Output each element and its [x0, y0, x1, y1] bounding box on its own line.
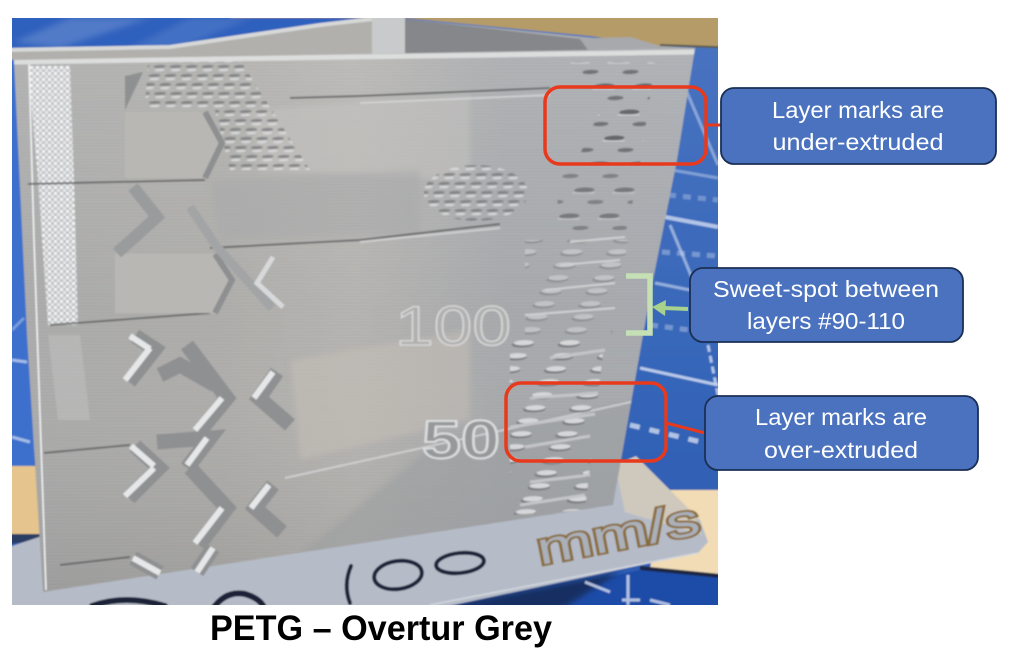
callout: over-extruded: over-extruded — [764, 437, 918, 463]
callout: under-extruded — [721, 88, 996, 164]
callout: over-extruded: Layer marks are — [755, 404, 927, 430]
lower x chevrons — [125, 336, 290, 573]
callout: sweet spot — [690, 268, 963, 342]
layer-change seams — [28, 88, 550, 565]
stipple patch around layer 150 — [424, 165, 528, 221]
upper x chevrons — [117, 187, 283, 308]
base plate with handwriting — [0, 456, 708, 610]
embossed layer number 100: 100 — [395, 294, 511, 357]
red highlight: over-extruded region — [506, 383, 666, 461]
connector: over-extruded — [666, 423, 705, 433]
handwritten marks — [92, 551, 485, 610]
callout: sweet spot: Sweet-spot between — [713, 276, 939, 302]
callout: sweet spot: layers #90-110 — [747, 308, 905, 334]
green bracket: sweet spot range — [626, 276, 650, 333]
warm light bands — [256, 100, 468, 178]
bright vertical seam — [28, 64, 90, 590]
photo: 3D printed PETG temperature tower — [12, 18, 718, 605]
photo background: dark mat in lower right — [452, 569, 718, 605]
callout: under-extruded: Layer marks are — [772, 97, 944, 123]
top rim — [14, 52, 695, 62]
photo background: wooden sticks — [0, 0, 740, 582]
callout: over-extruded — [705, 396, 978, 470]
hexagon infill marks — [115, 60, 310, 573]
embossed layer number 50: 50 — [422, 410, 500, 470]
green arrow to bracket — [652, 300, 688, 316]
connector: under-extruded — [706, 124, 721, 126]
callout: under-extruded: under-extruded — [772, 129, 944, 155]
column of under-extruded marks — [570, 62, 655, 165]
cut-out text: mm/s: mm/s — [532, 492, 704, 575]
sweet-spot marks — [525, 240, 628, 335]
inner back walls of the print — [0, 14, 696, 60]
red highlight: under-extruded region — [545, 87, 706, 164]
over-extruded marks — [510, 335, 605, 515]
photo background: blue cutting mat — [12, 18, 718, 605]
front face of the print — [14, 48, 695, 592]
title: PETG – Overtur Grey — [210, 609, 553, 648]
